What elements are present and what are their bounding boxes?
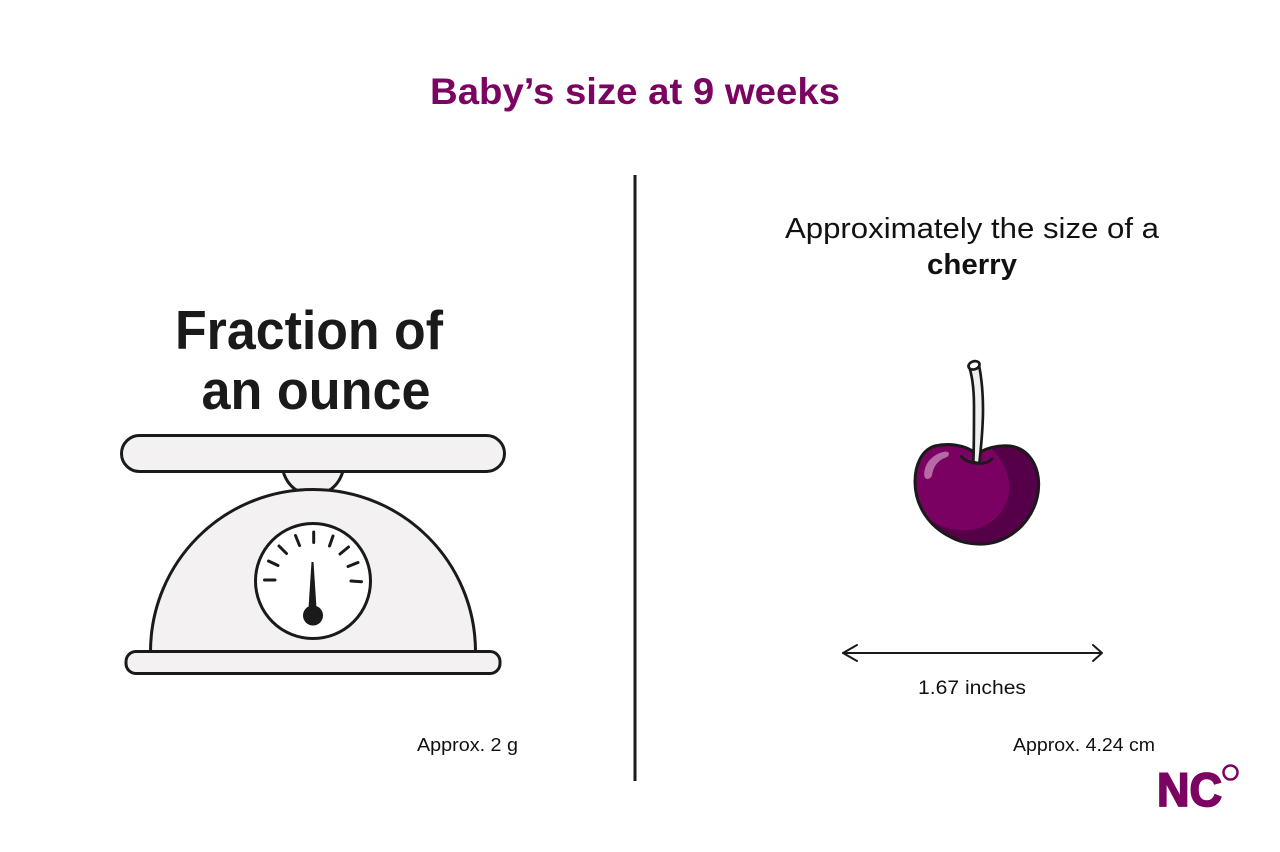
center divider [634,175,636,781]
heading: weight [175,299,444,421]
caption: length: Approx. 4.24 cm [1013,735,1155,755]
scale dome [150,490,476,652]
cherry body [916,446,1038,543]
heading: weight: an ounce [202,359,430,421]
scale top plate [122,436,504,472]
label: inches: 1.67 inches [918,678,1026,699]
cherry stem [970,365,983,463]
icon: cherry [910,360,1043,550]
heading: size comparison [785,213,1160,281]
logo: NC [1157,763,1222,816]
arrow: width [843,645,1102,661]
dial needle [308,562,316,608]
title: Baby’s size at 9 weeks [430,71,840,112]
icon: kitchen scale [122,436,504,674]
scale dial [256,524,370,638]
heading: size comparison: Approximately the size of a [785,213,1160,245]
heading: size comparison: cherry [927,249,1017,281]
scale base [126,652,500,674]
scale knob [283,471,343,492]
caption: weight: Approx. 2 g [417,735,518,755]
cherry dimple [961,456,992,464]
heading: weight: Fraction of [175,299,444,361]
